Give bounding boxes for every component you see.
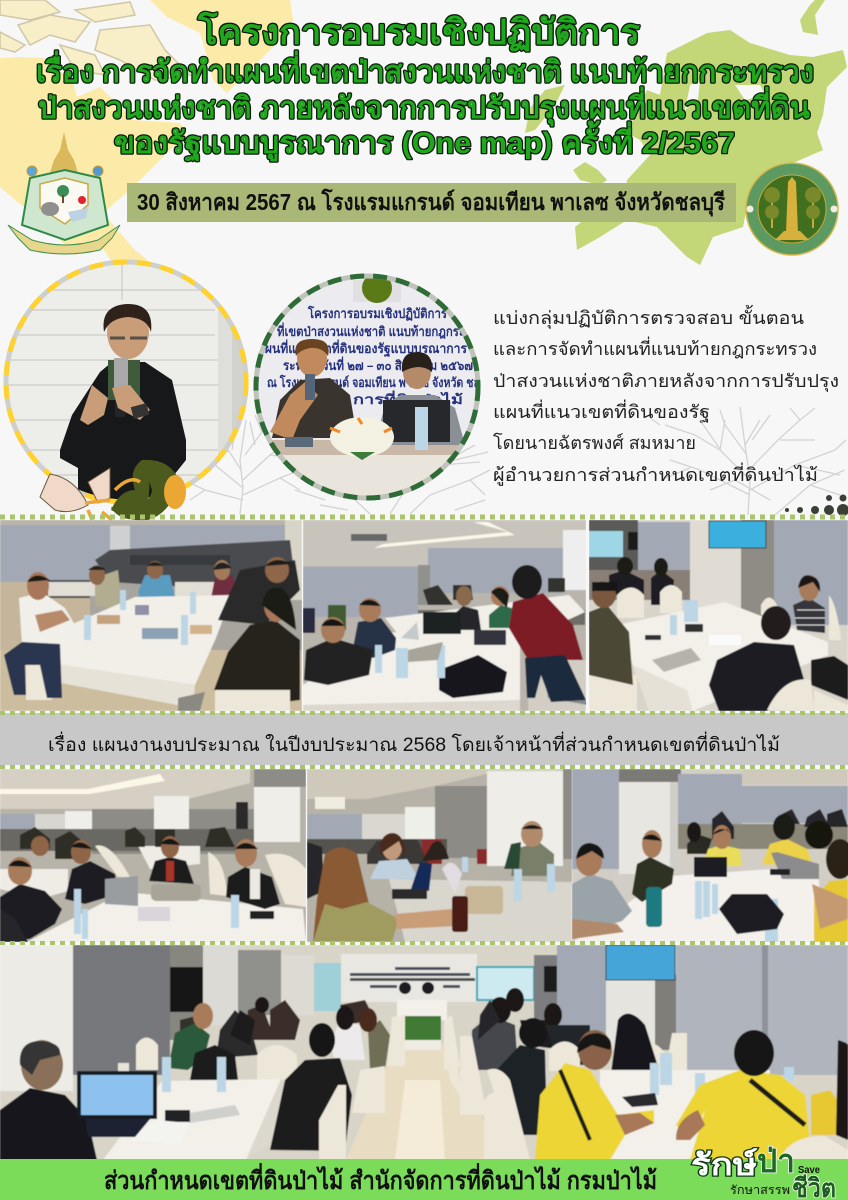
title: ป่าสงวนแห่งชาติ ภายหลังจากการปรับปรุงแผนที่แนวเขตที่ดิน bbox=[38, 86, 810, 127]
logo: รักษ์ป่า รักษาสรรพชีวิต bbox=[691, 1143, 836, 1200]
description text: ป่าสงวนแห่งชาติภายหลังจากการปรับปรุง bbox=[493, 371, 839, 392]
background: bare trees bbox=[188, 407, 848, 516]
photo: speaker in circle bbox=[0, 260, 250, 510]
photo row 3: full room training session bbox=[0, 945, 848, 1159]
icon: floral decoration bbox=[40, 460, 186, 520]
grey subtitle band bbox=[0, 713, 848, 765]
description text: แผนที่แนวเขตที่ดินของรัฐ bbox=[493, 399, 710, 423]
footer bar bbox=[0, 1159, 848, 1200]
date banner bbox=[127, 183, 736, 222]
description text bbox=[493, 305, 839, 486]
photo row 1, centre: delegates with laptops bbox=[303, 520, 586, 711]
footer bar: ส่วนกำหนดเขตที่ดินป่าไม้ สำนักจัดการที่ดินป่าไม้ กรมป่าไม้ bbox=[104, 1163, 657, 1195]
photo: two presenters in circle: โครงการอบรมเชิงปฏิบัติการ bbox=[307, 305, 447, 322]
photo: two presenters in circle: การที่ดินป่าไม้ bbox=[353, 390, 463, 407]
description text: และการจัดทำแผนที่แนบท้ายกฎกระทรวง bbox=[493, 336, 817, 359]
photo: two presenters in circle: แผนที่แนวเขตที่ดินของรัฐแบบบูรณาการ bbox=[257, 339, 467, 358]
photo row 2, right: delegates in yellow bbox=[572, 769, 848, 942]
date banner: 30 สิงหาคม 2567 ณ โรงแรมแกรนด์ จอมเทียน พาเลซ จังหวัดชลบุรี bbox=[137, 188, 726, 217]
icon: agency crest bbox=[8, 132, 120, 254]
photo: two presenters in circle: ที่เขตป่าสงวนแห่งชาติ แนบท้ายกฎกระ bbox=[277, 322, 465, 340]
description text: แบ่งกลุ่มปฏิบัติการตรวจสอบ ขั้นตอน bbox=[493, 305, 804, 329]
grey subtitle band: เรื่อง แผนงานงบประมาณ ในปีงบประมาณ 2568 โดยเจ้าหน้าที่ส่วนกำหนดเขตที่ดินป่าไม้ bbox=[48, 731, 780, 756]
logo: รักษ์ป่า รักษาสรรพชีวิต: รักษ์ bbox=[691, 1148, 758, 1182]
background: world map bbox=[0, 0, 847, 265]
logo: รักษ์ป่า รักษาสรรพชีวิต: รักษาสรรพ bbox=[730, 1183, 790, 1197]
photo row 2, centre: delegates at laptop bbox=[307, 769, 572, 942]
logo: รักษ์ป่า รักษาสรรพชีวิต: ป่า bbox=[757, 1143, 795, 1179]
title: โครงการอบรมเชิงปฏิบัติการ bbox=[197, 11, 640, 52]
icon: Royal Forest Department seal bbox=[746, 163, 838, 255]
photo row 1, right: small table group bbox=[589, 520, 848, 711]
logo: รักษ์ป่า รักษาสรรพชีวิต: Save bbox=[798, 1165, 820, 1176]
title: เรื่อง การจัดทำแผนที่เขตป่าสงวนแห่งชาติ แนบท้ายกกระทรวง bbox=[36, 50, 814, 89]
photo row 2, left: room with delegates bbox=[0, 769, 306, 942]
description text: โดยนายฉัตรพงศ์ สมหมาย bbox=[493, 432, 696, 453]
photo: two presenters in circle: ณ โรงแรมแกรนด์ จอมเทียน พาเลซ จังหวัด ชล bbox=[267, 374, 480, 390]
title: ของรัฐแบบบูรณาการ (One map) ครั้งที่ 2/2567 bbox=[114, 120, 735, 163]
photo: two presenters in circle: ระหว่างวันที่ ๒๗ – ๓๐ สิงหาคม ๒๕๖๗ bbox=[283, 356, 473, 373]
description text: ผู้อำนวยการส่วนกำหนดเขตที่ดินป่าไม้ bbox=[493, 462, 818, 486]
photo: two presenters in circle bbox=[250, 273, 485, 505]
photo row 1, left: seated delegates bbox=[0, 520, 302, 711]
title bbox=[36, 11, 814, 163]
